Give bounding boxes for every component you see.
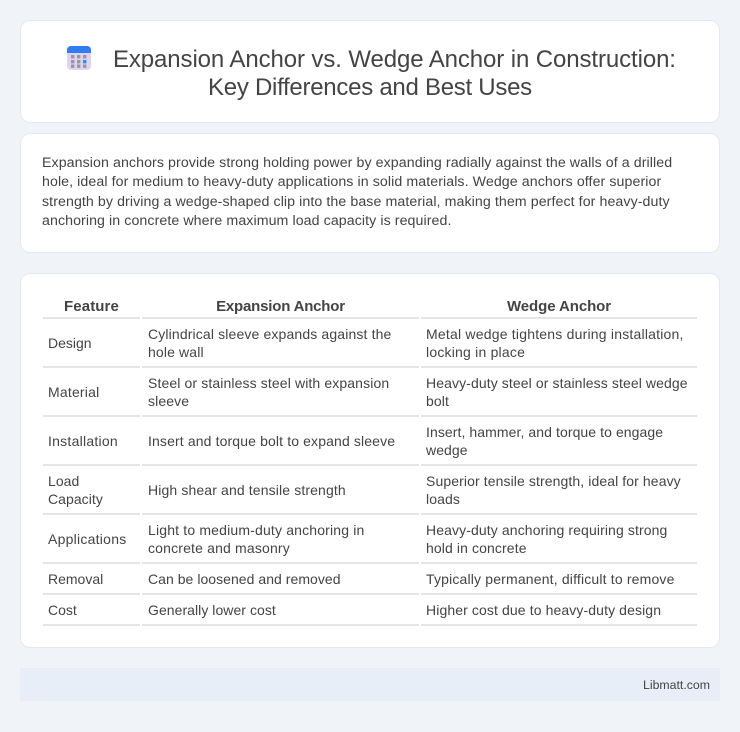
row: Applications: Applications <box>48 531 126 547</box>
Installation: wedge anchor <box>426 424 663 458</box>
Material: expansion anchor <box>148 375 389 409</box>
Design: wedge anchor: locking in place <box>426 344 525 360</box>
row: Load Capacity: Load <box>48 473 79 489</box>
Applications: wedge anchor: hold in concrete <box>426 540 527 556</box>
intro text: hole, ideal for medium to heavy-duty applications in solid materials. Wedge anchors offer superior <box>42 174 661 190</box>
Design: wedge anchor: Metal wedge tightens during installation, <box>426 326 684 342</box>
Installation: wedge anchor: Insert, hammer, and torque to engage <box>426 424 663 440</box>
icon: calendar <box>67 46 91 70</box>
row: Load Capacity: Capacity <box>48 491 103 507</box>
row: Cost: Cost <box>48 602 77 618</box>
intro text <box>42 155 672 229</box>
Design: expansion anchor: Cylindrical sleeve expands against the <box>148 326 391 342</box>
Applications: expansion anchor: Light to medium-duty anchoring in <box>148 522 365 538</box>
Applications: wedge anchor <box>426 522 667 556</box>
Design: expansion anchor <box>148 326 391 360</box>
row: Design: Design <box>48 335 92 351</box>
title: Expansion Anchor vs. Wedge Anchor in Construction: <box>113 46 676 73</box>
Design: expansion anchor: hole wall <box>148 344 204 360</box>
panel: comparison table <box>20 273 720 648</box>
Cost: expansion anchor: Generally lower cost <box>148 602 276 618</box>
panel: header <box>20 20 720 123</box>
intro text: strength by driving a wedge-shaped clip into the base material, making them perfect for heavy-duty <box>42 194 670 210</box>
row: Load Capacity <box>48 473 103 507</box>
Load Capacity: expansion anchor: High shear and tensile strength <box>148 482 346 498</box>
Load Capacity: wedge anchor <box>426 473 681 507</box>
row: Installation: Installation <box>48 433 118 449</box>
Installation: wedge anchor: wedge <box>426 442 468 458</box>
intro text: Expansion anchors provide strong holding power by expanding radially against the walls of a drilled <box>42 155 672 171</box>
Material: expansion anchor: Steel or stainless steel with expansion <box>148 375 389 391</box>
Material: expansion anchor: sleeve <box>148 393 189 409</box>
Load Capacity: wedge anchor: Superior tensile strength, ideal for heavy <box>426 473 681 489</box>
intro text: anchoring in concrete where maximum load capacity is required. <box>42 213 452 229</box>
Removal: expansion anchor: Can be loosened and removed <box>148 571 341 587</box>
panel: introduction <box>20 133 720 253</box>
footer <box>20 668 720 701</box>
row: Removal: Removal <box>48 571 103 587</box>
Installation: expansion anchor: Insert and torque bolt to expand sleeve <box>148 433 395 449</box>
Applications: expansion anchor: concrete and masonry <box>148 540 290 556</box>
row: Material: Material <box>48 384 99 400</box>
Applications: wedge anchor: Heavy-duty anchoring requiring strong <box>426 522 667 538</box>
Cost: wedge anchor: Higher cost due to heavy-duty design <box>426 602 661 618</box>
Load Capacity: wedge anchor: loads <box>426 491 460 507</box>
table header: Expansion Anchor: Expansion Anchor <box>216 298 345 315</box>
Applications: expansion anchor <box>148 522 365 556</box>
table header: Wedge Anchor: Wedge Anchor <box>507 298 611 315</box>
Material: wedge anchor: bolt <box>426 393 449 409</box>
Material: wedge anchor <box>426 375 688 409</box>
title line 2: Key Differences and Best Uses <box>208 74 532 101</box>
Material: wedge anchor: Heavy-duty steel or stainless steel wedge <box>426 375 688 391</box>
table header: Feature: Feature <box>64 298 119 315</box>
Design: wedge anchor <box>426 326 684 360</box>
footer credit: Libmatt.com <box>643 678 710 692</box>
Removal: wedge anchor: Typically permanent, difficult to remove <box>426 571 675 587</box>
